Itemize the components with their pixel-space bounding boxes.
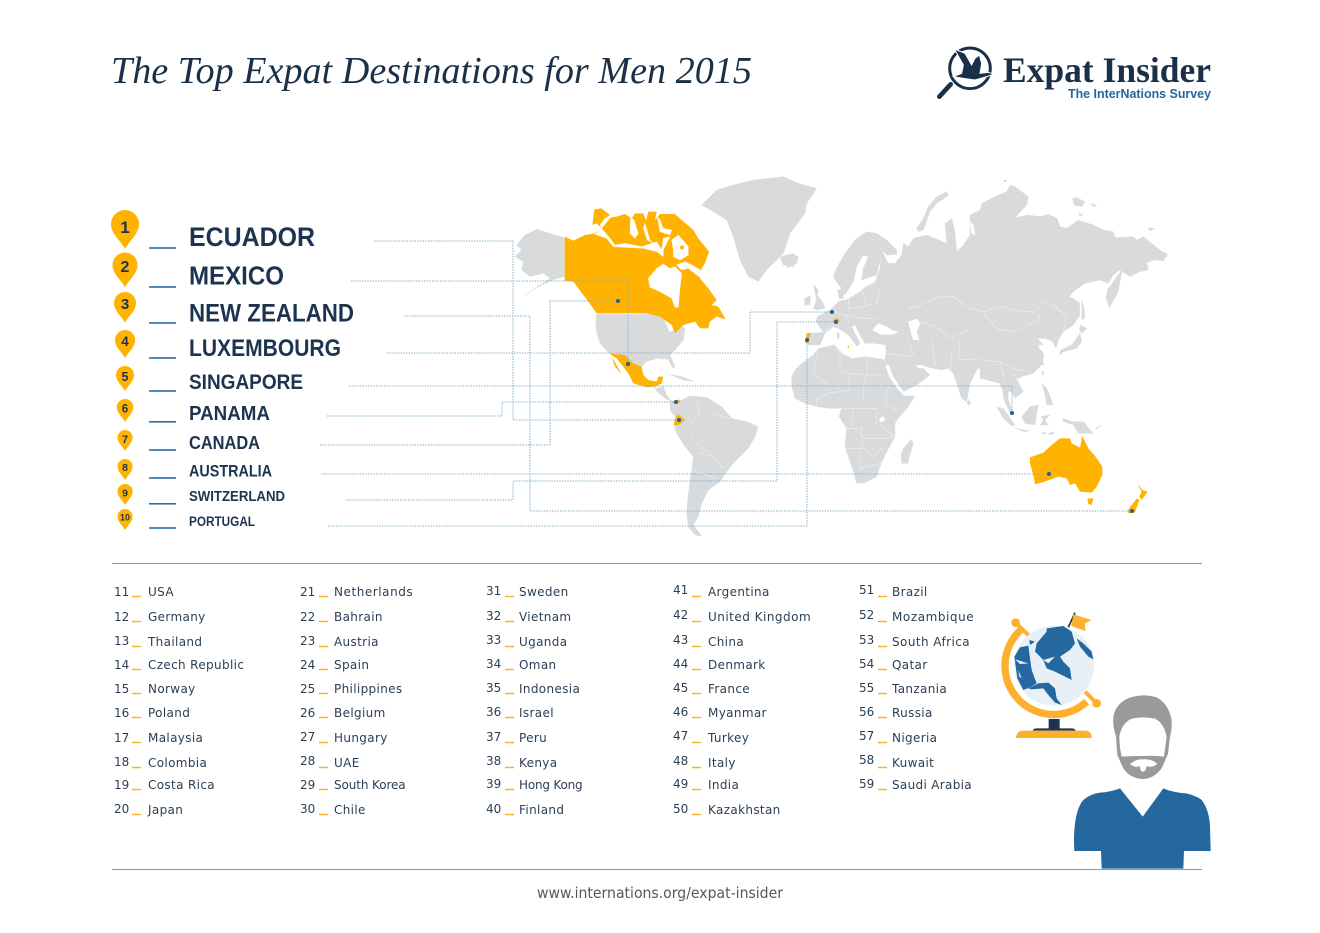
ranking column: 41 to 50: France [708, 682, 750, 696]
ranking column: 41 to 50: China [708, 635, 744, 649]
icon: bearded man [1074, 695, 1211, 869]
ranking column: 41 to 50: 46 [673, 705, 688, 719]
map: Africa, Middle East and India [792, 340, 985, 483]
rank 3 New Zealand [114, 292, 354, 328]
rank 4 Luxembourg: LUXEMBOURG [189, 335, 341, 362]
ranking column: 31 to 40: 40 [486, 802, 501, 816]
country: Tasmania [1087, 498, 1093, 505]
map: Europe and western Asia [781, 192, 980, 365]
map: Southeast Asia and Oceania [980, 350, 1148, 513]
rank 2 Mexico: 2 [121, 259, 130, 276]
ranking column: 31 to 40 [486, 584, 583, 817]
rank 6 Panama [117, 399, 270, 425]
title: The Top Expat Destinations for Men 2015 [111, 50, 752, 92]
ranking column: 11 to 20: 18 [114, 755, 129, 769]
ranking column: 31 to 40: Finland [519, 803, 564, 817]
ranking column: 21 to 30: Chile [334, 803, 366, 817]
ranking column: 11 to 20: Costa Rica [148, 778, 215, 792]
ranking column: 51 to 59: 51 [859, 583, 874, 597]
ranking column: 11 to 20: Germany [148, 610, 206, 624]
ranking column: 11 to 20: 11 [114, 585, 129, 599]
ranking column: 11 to 20: 16 [114, 706, 129, 720]
world map [515, 177, 1168, 536]
ranking column: 31 to 40: Indonesia [519, 682, 580, 696]
ranking column: 41 to 50: 42 [673, 608, 688, 622]
rank 4 Luxembourg: 4 [121, 334, 129, 349]
man: mouth [1130, 759, 1157, 772]
country: Ecuador [674, 414, 685, 425]
ranking column: 11 to 20: USA [148, 585, 174, 599]
ranking column: 21 to 30: 25 [300, 682, 315, 696]
rank 8 Australia: 8 [122, 462, 128, 474]
man: shirt [1074, 788, 1211, 869]
rank 7 Canada [118, 430, 260, 453]
top divider [112, 563, 1202, 564]
ranking column: 31 to 40: Oman [519, 658, 556, 672]
ranking column: 51 to 59: Tanzania [891, 682, 947, 696]
rank 10 Portugal [118, 509, 255, 530]
ranking column: 11 to 20: 14 [114, 658, 129, 672]
ranking column: 31 to 40: 31 [486, 584, 501, 598]
ranking column: 21 to 30: South Korea [334, 778, 406, 792]
ranking column: 21 to 30: 22 [300, 610, 315, 624]
ranking column: 11 to 20: 13 [114, 634, 129, 648]
country: New Zealand [1127, 483, 1148, 513]
connector: Mexico [351, 281, 630, 366]
ranking column: 21 to 30: 24 [300, 658, 315, 672]
ranking column: 41 to 50: 44 [673, 657, 688, 671]
connector: New Zealand [404, 316, 1134, 513]
ranking column: 41 to 50: 47 [673, 729, 688, 743]
rank 9 Switzerland: 9 [122, 488, 128, 500]
connector: Australia [322, 472, 1051, 476]
ranking column: 51 to 59: 59 [859, 777, 874, 791]
Malta [848, 346, 849, 348]
ranking column: 51 to 59: Nigeria [892, 731, 937, 745]
ranking column: 21 to 30: 27 [300, 730, 315, 744]
ranking column: 31 to 40: Hong Kong [519, 778, 583, 792]
connector: Singapore [349, 386, 1014, 415]
ranking column: 21 to 30: Netherlands [334, 585, 413, 599]
ranking column: 21 to 30: 23 [300, 634, 315, 648]
country: Switzerland [833, 318, 840, 322]
ranking column: 31 to 40: 37 [486, 730, 501, 744]
ranking column: 11 to 20: 17 [114, 731, 129, 745]
rank 6 Panama: PANAMA [189, 402, 270, 425]
rank 9 Switzerland [118, 484, 285, 505]
connector: Portugal [328, 338, 809, 526]
man: hair and beard [1113, 695, 1172, 779]
ranking column: 51 to 59: Mozambique [892, 610, 974, 624]
ranking column: 41 to 50: Italy [708, 756, 736, 770]
ranking column: 21 to 30 [300, 585, 413, 817]
rank 8 Australia [118, 459, 272, 480]
ranking column: 11 to 20 [114, 585, 244, 817]
ranking column: 41 to 50: United Kingdom [708, 610, 811, 624]
ranking column: 21 to 30: 28 [300, 754, 315, 768]
rank 1 Ecuador [111, 210, 315, 252]
ranking column: 41 to 50: 45 [673, 681, 688, 695]
ranking column: 11 to 20: 12 [114, 610, 129, 624]
ranking column: 51 to 59: South Africa [892, 635, 970, 649]
ranking column: 11 to 20: Poland [148, 706, 190, 720]
connector: Panama [327, 400, 678, 416]
ranking column: 51 to 59: 52 [859, 608, 874, 622]
ranking column: 21 to 30: 30 [300, 802, 315, 816]
ranking column: 11 to 20: Malaysia [148, 731, 203, 745]
rank 8 Australia: AUSTRALIA [189, 462, 272, 480]
connector: Ecuador [374, 241, 681, 422]
ranking column: 31 to 40: Kenya [519, 756, 557, 770]
ranking column: 11 to 20: 15 [114, 682, 129, 696]
ranking column: 51 to 59: 54 [859, 657, 874, 671]
ranking column: 31 to 40: Peru [519, 731, 547, 745]
country: Canada [565, 208, 726, 333]
connector: Switzerland [346, 320, 838, 500]
rank 1 Ecuador: 1 [120, 218, 130, 237]
ranking column: 51 to 59: 56 [859, 705, 874, 719]
ranking column: 11 to 20: Colombia [148, 756, 207, 770]
ranking column: 31 to 40: Uganda [519, 635, 567, 649]
country: Portugal [805, 333, 811, 343]
rank 7 Canada: CANADA [189, 432, 260, 453]
rank 5 Singapore: SINGAPORE [189, 370, 303, 394]
ranking column: 51 to 59: Saudi Arabia [892, 778, 972, 792]
logo tagline: The InterNations Survey [1068, 87, 1211, 101]
country: Mexico [609, 353, 663, 387]
ranking column: 11 to 20: 20 [114, 802, 129, 816]
ranking column: 31 to 40: Vietnam [519, 610, 571, 624]
ranking column: 41 to 50: 49 [673, 777, 688, 791]
rank 1 Ecuador: ECUADOR [189, 222, 315, 252]
map: eastern Asia [970, 180, 1168, 365]
ranking column: 31 to 40: 36 [486, 705, 501, 719]
ranking column: 21 to 30: Austria [334, 635, 379, 649]
ranking column: 41 to 50 [673, 583, 811, 817]
ranking column: 41 to 50: 50 [673, 802, 688, 816]
ranking column: 51 to 59: 53 [859, 633, 874, 647]
rank 2 Mexico: MEXICO [189, 260, 284, 290]
ranking column: 21 to 30: Belgium [334, 706, 386, 720]
icon: magnifier with bird [939, 48, 994, 97]
rank 7 Canada: 7 [122, 434, 128, 446]
logo wordmark: Expat Insider [1003, 50, 1211, 90]
rank 5 Singapore: 5 [122, 370, 129, 384]
ranking column: 51 to 59: 55 [859, 681, 874, 695]
map: Americas [515, 177, 817, 536]
ranking column: 11 to 20: Norway [148, 682, 196, 696]
ranking column: 41 to 50: India [708, 778, 739, 792]
rank 10 Portugal: 10 [120, 512, 130, 522]
ranking column: 31 to 40: 33 [486, 633, 501, 647]
ranking column: 51 to 59: Brazil [892, 585, 928, 599]
ranking column: 31 to 40: 39 [486, 777, 501, 791]
ranking column: 21 to 30: Hungary [334, 731, 388, 745]
icon: globe with flag [1005, 613, 1101, 738]
rank 5 Singapore [116, 366, 303, 394]
ranking column: 31 to 40: 32 [486, 609, 501, 623]
ranking column: 41 to 50: 43 [673, 633, 688, 647]
ranking column: 41 to 50: 41 [673, 583, 688, 597]
ranking column: 41 to 50: 48 [673, 754, 688, 768]
ranking column: 21 to 30: UAE [334, 756, 360, 770]
connector: Canada [320, 299, 620, 445]
ranking column: 21 to 30: Philippines [334, 682, 403, 696]
ranking column: 41 to 50: Myanmar [708, 706, 767, 720]
ranking column: 21 to 30: Spain [334, 658, 369, 672]
ranking column: 51 to 59: Russia [892, 706, 933, 720]
country: Australia [1030, 436, 1102, 493]
ranking column: 41 to 50: Kazakhstan [708, 803, 781, 817]
ranking column: 51 to 59: Qatar [892, 658, 928, 672]
ranking column: 51 to 59 [859, 583, 974, 792]
rank 10 Portugal: PORTUGAL [189, 514, 255, 529]
ranking column: 31 to 40: Sweden [519, 585, 569, 599]
rank 3 New Zealand: 3 [121, 296, 129, 313]
ranking column: 31 to 40: Israel [519, 706, 554, 720]
ranking column: 21 to 30: 29 [300, 778, 315, 792]
top 10 ranking [111, 210, 354, 530]
ranking column: 21 to 30: Bahrain [334, 610, 383, 624]
ranking column: 51 to 59: Kuwait [892, 756, 934, 770]
ranking column: 21 to 30: 21 [300, 585, 315, 599]
ranking column: 11 to 20: Thailand [147, 635, 202, 649]
ranking column: 31 to 40: 38 [486, 754, 501, 768]
rank 3 New Zealand: NEW ZEALAND [189, 300, 354, 328]
rank 4 Luxembourg [115, 330, 341, 362]
ranking column: 31 to 40: 35 [486, 681, 501, 695]
ranking column: 51 to 59: 57 [859, 729, 874, 743]
ranking column: 41 to 50: Denmark [708, 658, 766, 672]
ranking column: 11 to 20: Czech Republic [148, 658, 244, 672]
logo: Expat Insider [939, 48, 1211, 101]
ranking column: 11 to 20: Japan [147, 803, 183, 817]
ranking column: 11 to 20: 19 [114, 778, 129, 792]
ranking column: 41 to 50: Argentina [708, 585, 770, 599]
ranking column: 31 to 40: 34 [486, 657, 501, 671]
rank 2 Mexico [112, 252, 284, 290]
rank 6 Panama: 6 [122, 404, 128, 416]
ranking column: 41 to 50: Turkey [707, 731, 749, 745]
man: face [1119, 717, 1167, 757]
bottom divider [112, 869, 1202, 870]
ranking column: 21 to 30: 26 [300, 706, 315, 720]
ranking column: 51 to 59: 58 [859, 753, 874, 767]
rank 9 Switzerland: SWITZERLAND [189, 488, 285, 505]
country: Panama [670, 399, 680, 404]
website url: www.internations.org/expat-insider [537, 884, 784, 902]
connector: Luxembourg [387, 310, 834, 353]
